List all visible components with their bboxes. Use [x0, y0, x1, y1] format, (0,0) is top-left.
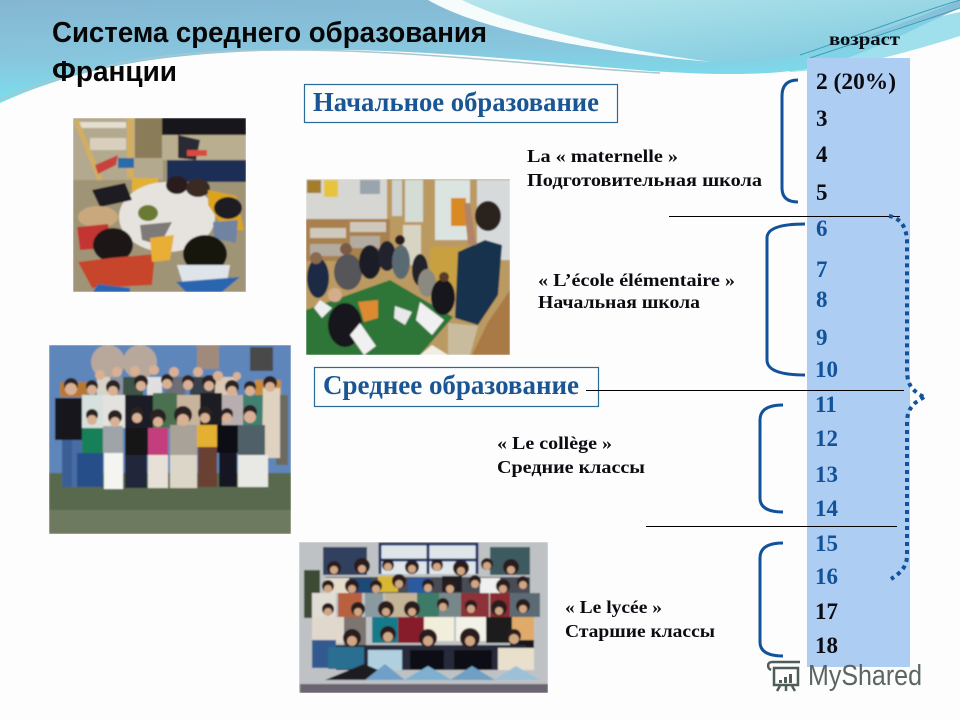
- arrow: compulsory schooling dotted bracket: [889, 216, 924, 579]
- age numbers: 17: [815, 599, 838, 624]
- heading box: primary education: Начальное образование: [313, 87, 599, 117]
- bracket: lycee ages: [760, 543, 783, 656]
- label: ecole elementaire: [538, 270, 735, 312]
- heading box: secondary education: [314, 368, 598, 406]
- label: ecole elementaire: Начальная школа: [538, 292, 700, 312]
- age numbers: 16: [815, 564, 838, 589]
- bracket: college ages: [760, 405, 783, 512]
- label: ecole elementaire: « L’école élémentaire »: [538, 270, 735, 290]
- age numbers: 9: [816, 325, 828, 350]
- age numbers: 13: [815, 462, 838, 487]
- label: le lycee: [565, 597, 715, 641]
- label: la maternelle: La « maternelle »: [527, 146, 678, 166]
- age numbers: 5: [816, 180, 828, 205]
- bracket: elementary ages: [767, 224, 805, 375]
- header wave background: [0, 0, 960, 103]
- watermark: MyShared: [768, 660, 922, 692]
- age numbers: 7: [816, 257, 828, 282]
- photo: lycee class group: [299, 542, 548, 693]
- age numbers: 15: [815, 531, 838, 556]
- heading box: secondary education: Среднее образование: [323, 370, 579, 400]
- photo: primary class with teacher: [306, 179, 510, 355]
- title: Система среднего образования: [52, 17, 487, 49]
- age column heading: возраст: [829, 29, 900, 49]
- age numbers: 12: [815, 426, 838, 451]
- age numbers: 3: [816, 106, 828, 131]
- age numbers: 10: [815, 357, 838, 382]
- title: Франции: [52, 56, 177, 88]
- bracket: maternelle ages: [782, 80, 798, 202]
- age numbers: 2 (20%): [816, 69, 896, 94]
- age numbers: 11: [815, 392, 837, 417]
- divider lines between school stages: [586, 216, 904, 526]
- label: la maternelle: Подготовительная школа: [527, 170, 762, 190]
- label: le college: Средние классы: [497, 457, 645, 477]
- age numbers: 8: [816, 287, 828, 312]
- age numbers: 14: [815, 496, 838, 521]
- age column panel: [807, 58, 910, 667]
- watermark: MyShared: MyShared: [808, 660, 922, 692]
- photo: kindergarten children at a table: [73, 118, 246, 292]
- label: le college: « Le collège »: [497, 433, 612, 453]
- age numbers: 18: [815, 633, 838, 658]
- label: le lycee: Старшие классы: [565, 621, 715, 641]
- label: le lycee: « Le lycée »: [565, 597, 662, 617]
- label: le college: [497, 433, 645, 477]
- age numbers: [815, 69, 896, 658]
- title: [52, 17, 487, 88]
- age numbers: 6: [816, 216, 828, 241]
- age numbers: 4: [816, 142, 828, 167]
- photo: middle school class group: [49, 345, 291, 534]
- label: la maternelle: [527, 146, 762, 190]
